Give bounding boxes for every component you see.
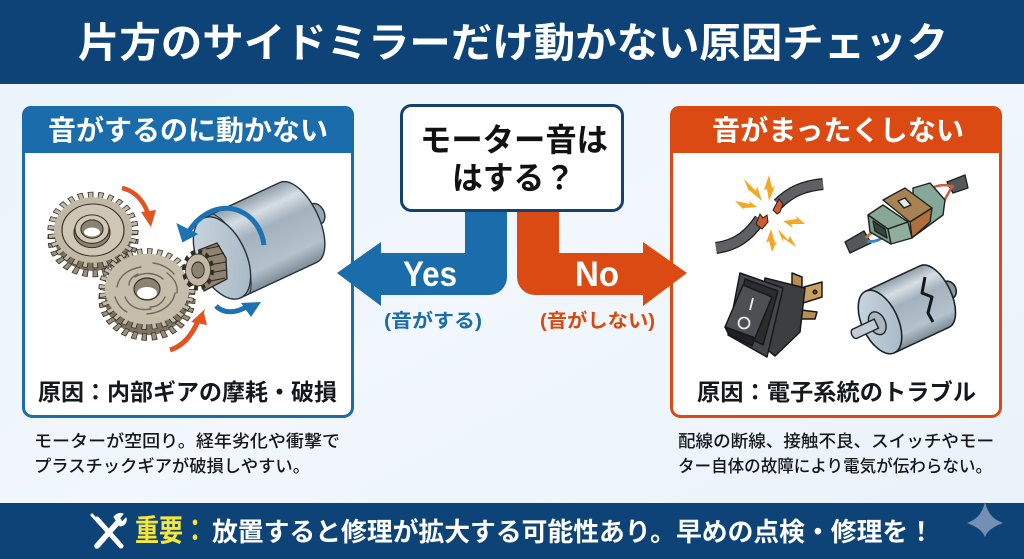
icon: sparks [735, 175, 805, 252]
icon: motor body [182, 171, 342, 308]
text block: right explanation: 配線の断線、接触不良、スイッチやモー [678, 432, 994, 451]
text block: left explanation [34, 431, 340, 476]
panel heading: 音がまったくしない [712, 114, 964, 146]
footer banner [0, 502, 1024, 559]
panel caption: cause: 原因：内部ギアの摩耗・破損 [38, 379, 337, 405]
panel caption: cause: 原因：電子系統のトラブル [697, 379, 976, 405]
icon: broken wire [716, 175, 823, 252]
panel header: orange [670, 106, 1002, 153]
icon: corroded connector [845, 175, 968, 253]
arrow: yes [337, 211, 507, 306]
arrow: no [517, 211, 687, 306]
icon: cracked motor [838, 256, 970, 366]
panel heading: 音がするのに動かない [48, 114, 328, 146]
icon: pinion gear [185, 243, 227, 291]
footer emphasis: 重要： [135, 515, 207, 548]
text block: left explanation: プラスチックギアが破損しやすい。 [34, 456, 310, 476]
panel header: blue [22, 106, 354, 153]
icon: upper gear [52, 196, 134, 273]
question line 2: はする？ [452, 160, 575, 196]
crack [922, 277, 933, 322]
title: 片方のサイドミラーだけ動かない原因チェック [78, 20, 948, 66]
yes sublabel: (音がする) [384, 309, 482, 332]
icon: worn lower gear [103, 252, 191, 337]
panel: no sound [670, 106, 1002, 416]
yes label: Yes [403, 255, 457, 294]
icon: crossed tools [92, 513, 126, 546]
question line 1: モーター音は [420, 122, 608, 158]
question box [402, 106, 622, 210]
text block: right explanation [678, 432, 994, 476]
icon: rocker switch [725, 273, 822, 357]
arrow: orange lower [170, 309, 207, 350]
arrow: blue upper [178, 208, 264, 245]
arrow: orange upper [122, 188, 156, 227]
no sublabel: (音がしない) [540, 309, 655, 332]
footer message: 放置すると修理が拡大する可能性あり。早めの点検・修理を！ [212, 517, 934, 547]
text block: left explanation: モーターが空回り。経年劣化や衝撃で [34, 431, 340, 451]
icon: sparkle [967, 502, 1003, 537]
panel: sound but no movement [22, 106, 354, 416]
no label: No [575, 255, 619, 294]
title banner [0, 0, 1024, 84]
illustration: worn gears and motor [52, 171, 342, 350]
arrow: blue lower [216, 302, 261, 317]
text block: right explanation: ター自体の故障により電気が伝わらない。 [678, 456, 992, 476]
